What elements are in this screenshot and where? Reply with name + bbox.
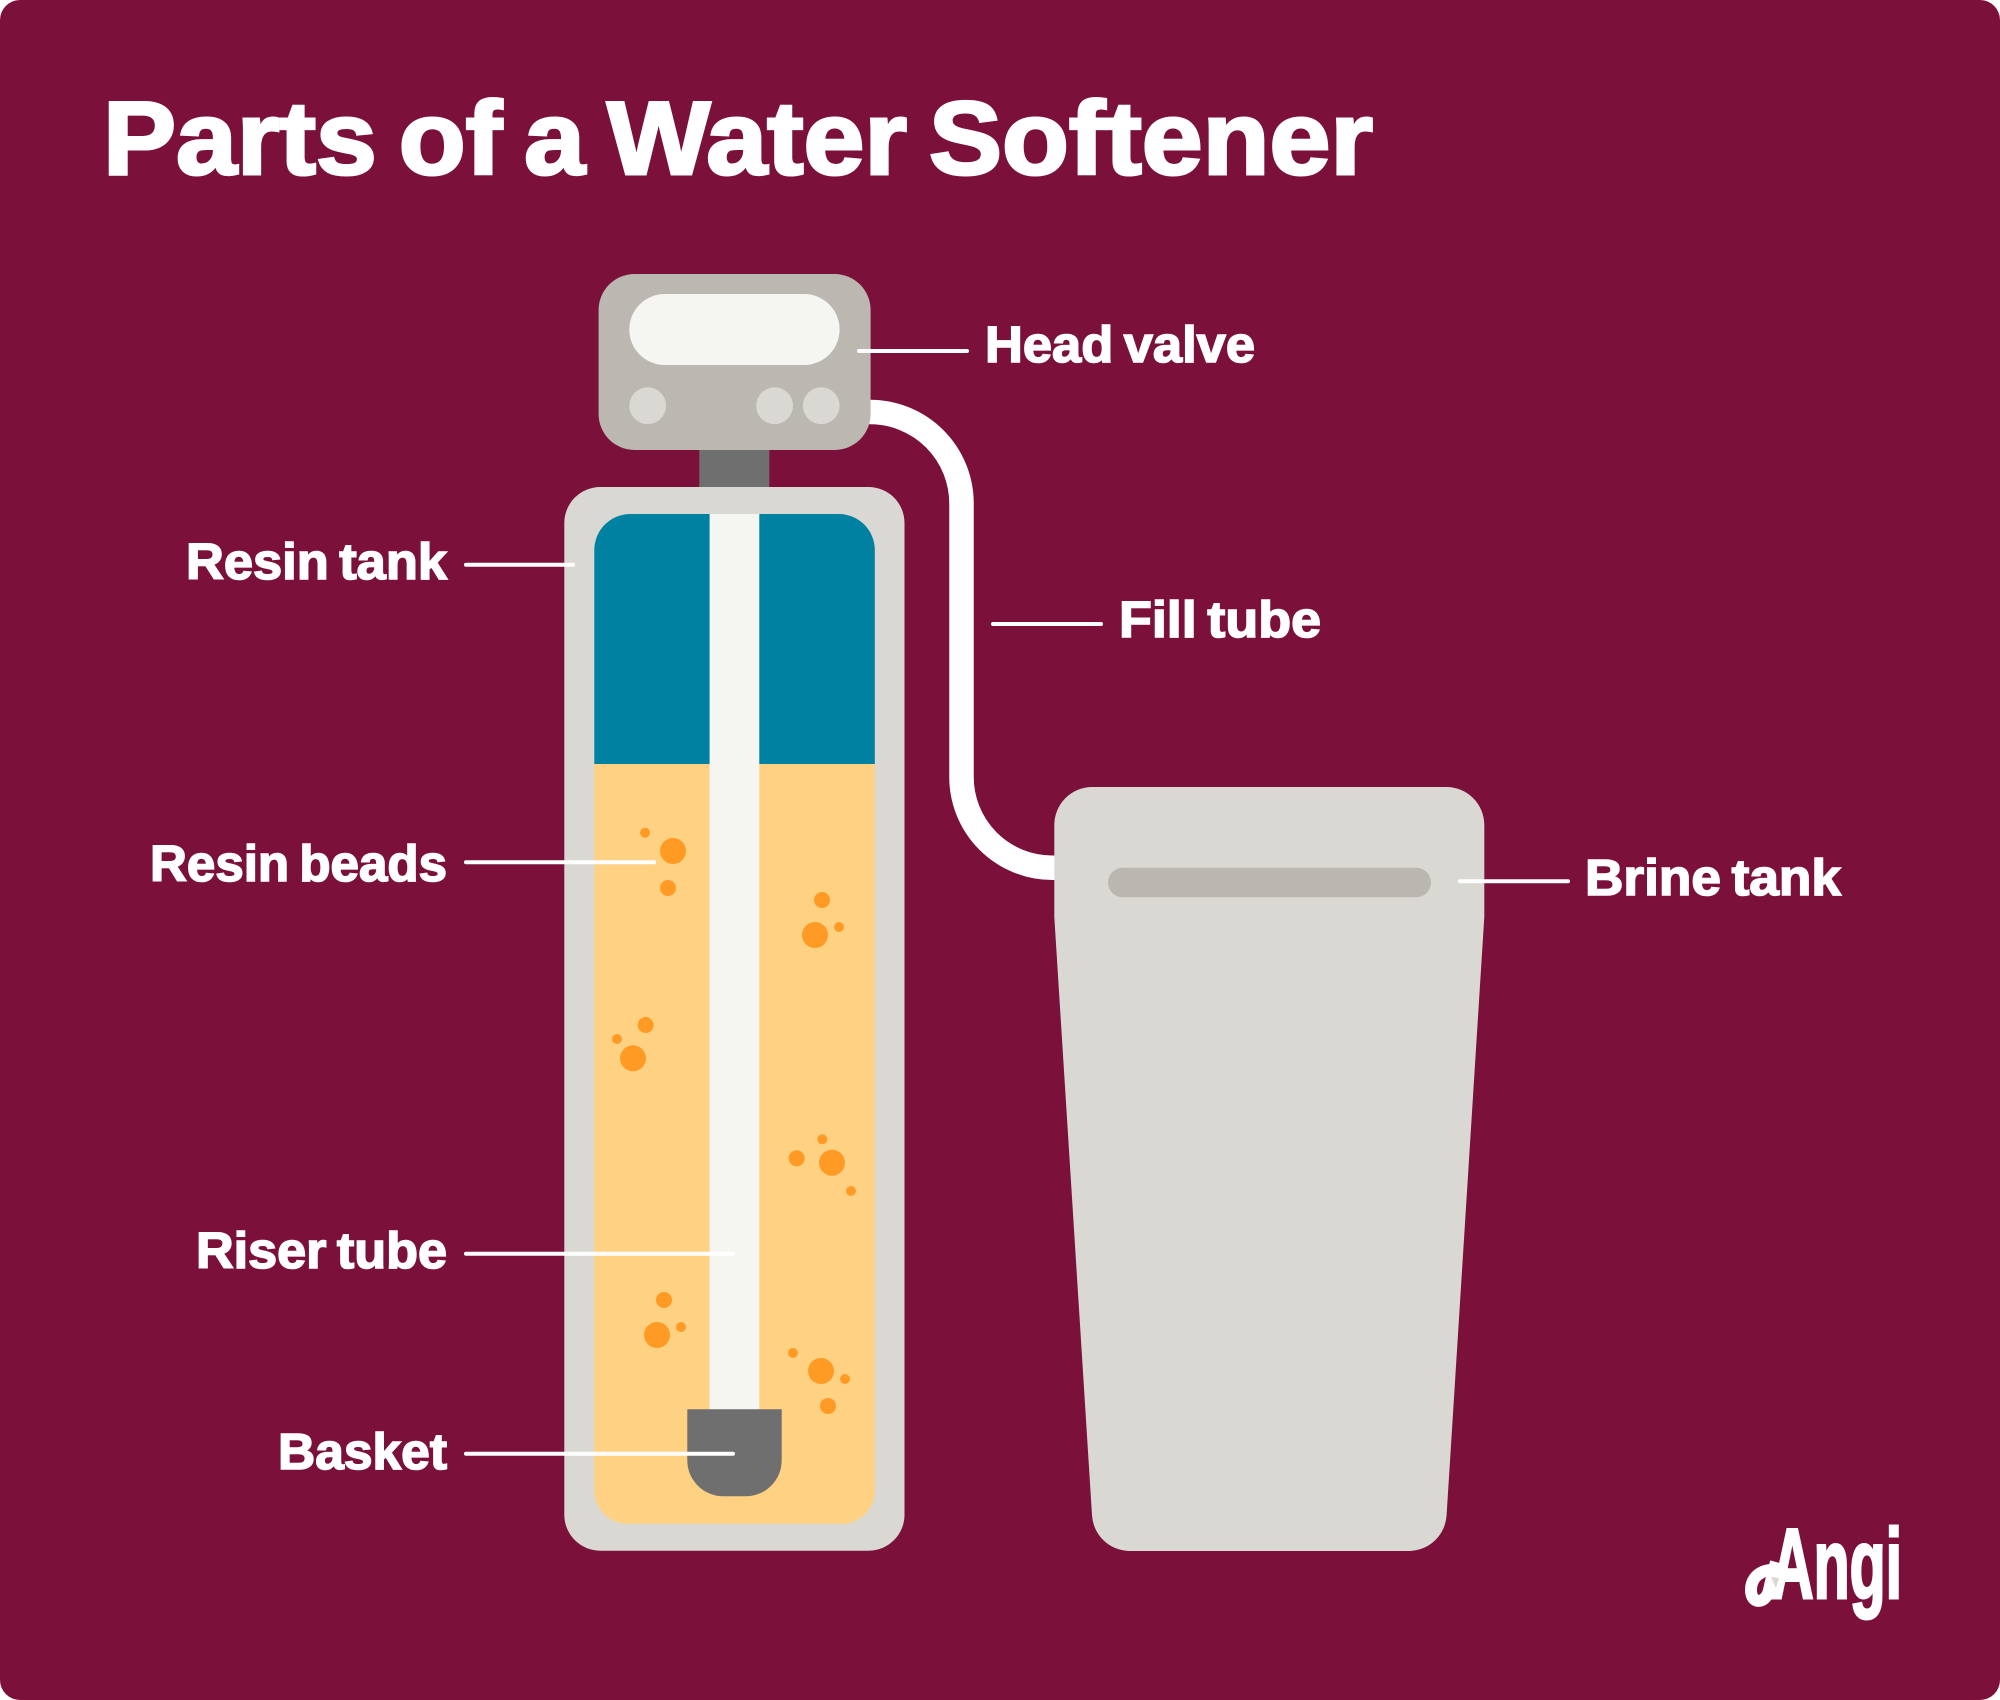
resin beads (612, 828, 856, 1414)
basket (687, 1409, 782, 1496)
resin tank (564, 487, 904, 1551)
head valve display (629, 294, 840, 365)
neck connector (699, 445, 769, 490)
logo: Angi: Angi (1771, 1508, 1902, 1619)
brine tank slot (1108, 868, 1431, 897)
title: Parts of a Water Softener (103, 81, 1373, 197)
water layer (594, 514, 875, 764)
riser tube (710, 514, 759, 1410)
head valve button right (803, 387, 840, 424)
resin bed (594, 764, 875, 1524)
brine tank (1054, 787, 1484, 1551)
label: Head valve: Head valve (985, 316, 1255, 373)
label: Brine tank: Brine tank (1585, 849, 1842, 906)
fill tube (860, 412, 1060, 868)
head valve (599, 274, 871, 450)
label: Fill tube: Fill tube (1119, 591, 1321, 648)
label: Resin tank: Resin tank (186, 533, 448, 590)
head valve button middle (756, 387, 793, 424)
label: Riser tube: Riser tube (196, 1222, 447, 1279)
label: Resin beads: Resin beads (150, 835, 447, 892)
head valve button left (629, 387, 666, 424)
logo: Angi (1751, 1508, 1902, 1619)
label: Basket: Basket (278, 1423, 447, 1480)
